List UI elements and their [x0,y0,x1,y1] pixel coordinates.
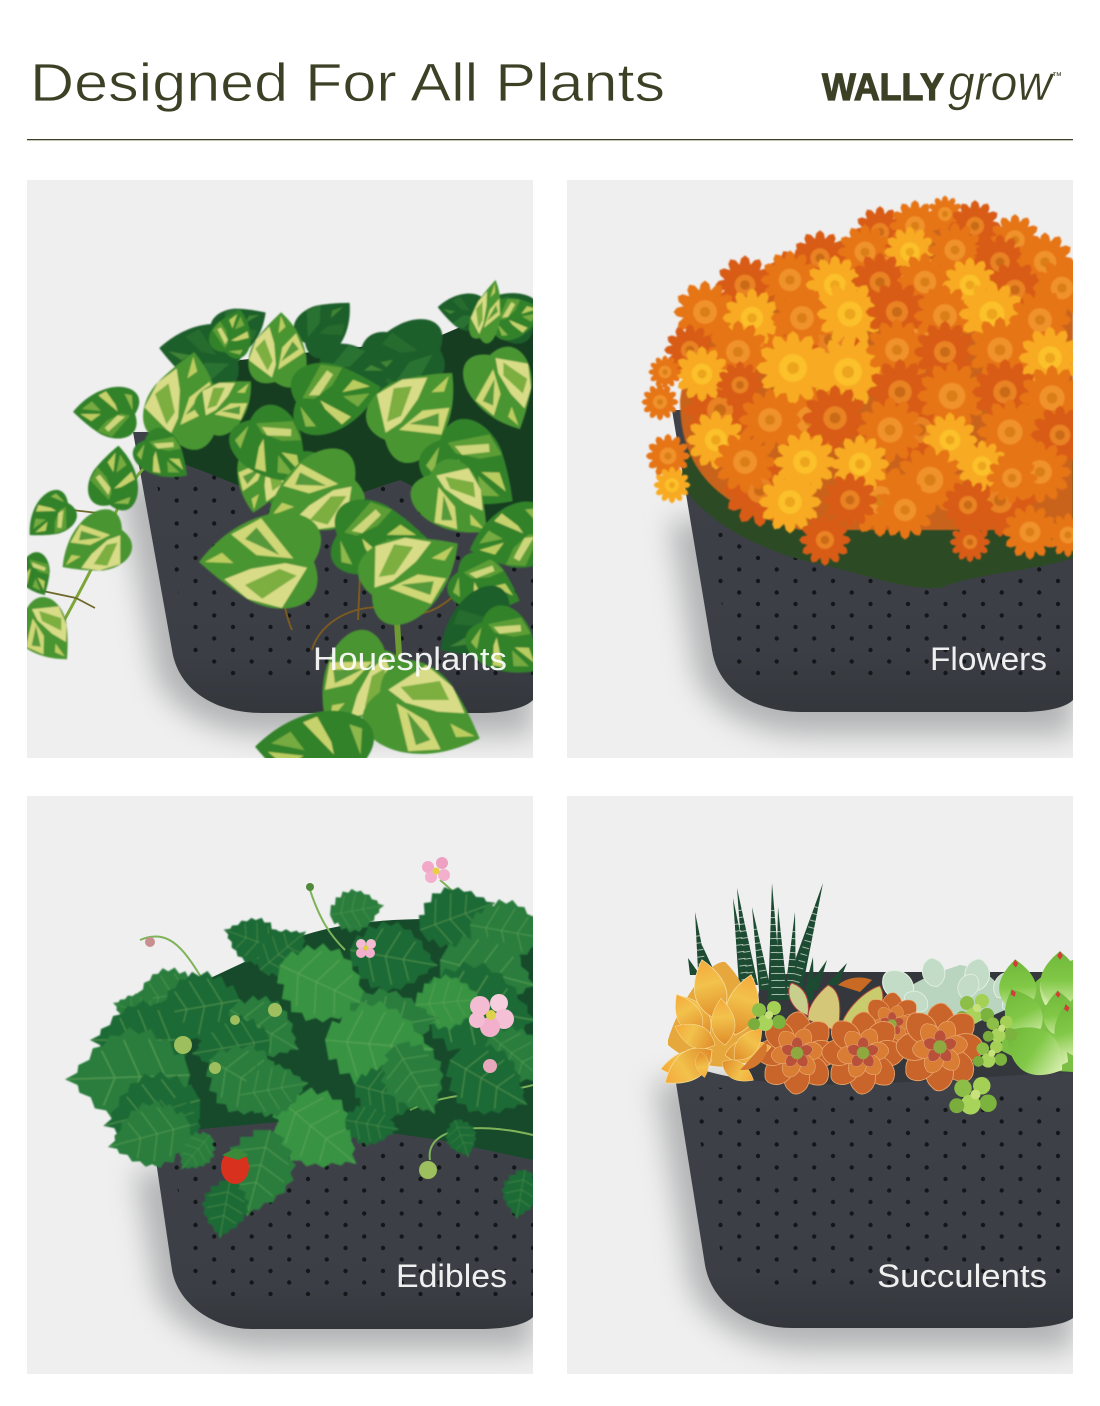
logo: WALLYgrow [822,55,1062,111]
pink blossoms [356,857,514,1073]
wall planter [133,430,533,713]
runners and stems [140,880,533,1160]
label: Houesplants: Houesplants [313,641,507,677]
trailing vine stems [44,468,452,659]
panel: succulents [567,796,1098,1374]
foliage mass [184,919,533,1160]
strawberry leaves [64,886,533,1239]
title: Designed For All Plants [30,53,665,113]
orange-red rosettes [756,993,994,1094]
logo: WALLYgrow: grow [948,55,1055,111]
zebra aloe [688,883,847,1000]
chrysanthemum blooms [642,196,1092,566]
wall planter [672,410,1073,712]
pothos leaves [27,280,533,758]
label: Edibles: Edibles [396,1258,507,1294]
big green succulent [999,951,1073,1076]
logo: WALLYgrow: WALLY [822,67,944,109]
fruit buds [145,883,437,1179]
red tipped succulent [789,978,883,1036]
wall planter [672,972,1073,1328]
logo: WALLYgrow: ™ [1052,71,1062,82]
panel: edibles [27,796,562,1374]
strawberry [221,1148,249,1184]
label: Flowers: Flowers [930,641,1047,677]
label: Succulents: Succulents [877,1258,1047,1294]
dark foliage under blooms [681,448,1073,588]
panel: houseplants [27,180,533,758]
yellow rosette [660,959,772,1084]
panel: flowers [567,180,1092,758]
pale green echeveria [882,958,1006,1022]
foliage mass [180,324,533,522]
wall planter [150,1120,533,1329]
green bead sedum [748,1001,1017,1114]
